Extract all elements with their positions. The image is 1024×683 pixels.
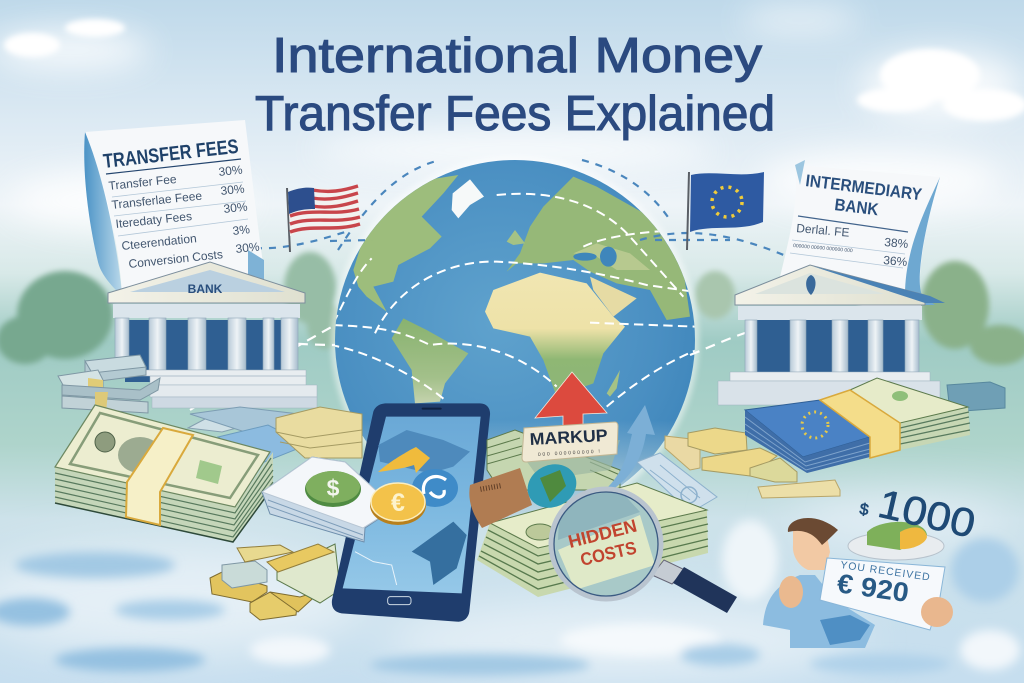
hair [788, 518, 838, 545]
continent: north america [353, 175, 458, 312]
blue rising arrow [608, 405, 655, 490]
hand holding card [921, 597, 953, 627]
receipt rows: Cteerendation [121, 231, 197, 253]
gold blocks center right [665, 428, 840, 498]
britain [507, 230, 525, 245]
red markup arrow [535, 372, 607, 430]
icon: euro coin [370, 483, 426, 525]
cash stack behind markup [487, 430, 620, 490]
receipt heading: INTERMEDIARY [805, 171, 924, 204]
large left cash stack [55, 405, 273, 542]
handle [652, 560, 737, 613]
markup label: 000 000000000 ! [538, 449, 600, 458]
continent: africa [485, 273, 625, 397]
magnifier with hidden costs [551, 489, 737, 613]
rolled document [637, 453, 717, 507]
plate with coin [848, 532, 944, 560]
receipt rows: Derlal. FE [796, 221, 850, 240]
pile of bills and gold bottom left of phone [210, 544, 340, 620]
right receipt: intermediary bank [775, 160, 940, 310]
brown envelope: ıııııııı [479, 480, 502, 495]
currency band [126, 428, 193, 525]
faded bills behind left cash [188, 407, 307, 463]
receipt rows: 3% [232, 222, 251, 238]
icon: blue swirl coin [412, 469, 458, 507]
title: Transfer Fees Explained [255, 87, 775, 141]
right bottom cash stack [477, 483, 708, 597]
left bank building [107, 262, 317, 408]
you received label: YOU RECEIVED [840, 559, 931, 584]
stack of papers [262, 457, 395, 542]
flag: united states [287, 184, 360, 252]
continent: south america [392, 318, 468, 403]
title: International Money [272, 29, 763, 83]
gold stacks behind left cash [276, 407, 362, 458]
receipt rows: 36% [883, 253, 908, 269]
trees right [695, 261, 1024, 365]
card [820, 558, 945, 630]
right bank building [718, 265, 945, 405]
icon: dollar coin: $ [327, 475, 340, 501]
receipt rows: Iteredaty Fees [115, 209, 193, 231]
person holding receipt [763, 518, 953, 648]
receipt rows: 30% [223, 200, 249, 216]
original amount: 1000 [874, 482, 979, 547]
receipt rows: 30% [218, 163, 244, 179]
shirt [763, 575, 875, 648]
trees left [0, 252, 343, 364]
hidden costs label: HIDDEN [566, 516, 639, 552]
far right small cash stack [947, 382, 1005, 412]
phone screen map [343, 417, 481, 593]
white dashed routes [330, 194, 697, 407]
receipt rows: Conversion Costs [128, 247, 224, 271]
greenland [452, 179, 484, 218]
hand at collar [779, 576, 803, 608]
icon: yellow arrow [378, 447, 430, 473]
small globe token [520, 456, 584, 516]
receipt rows: Transfer Fee [108, 172, 178, 193]
flag: european union [687, 172, 764, 250]
icon: dollar coin [305, 471, 361, 507]
globe lower fade [362, 426, 672, 520]
globe [330, 156, 699, 524]
receipt heading: TRANSFER FEES [102, 136, 240, 173]
brown envelope [469, 468, 532, 528]
receipt rows: 38% [884, 235, 909, 251]
title [255, 29, 775, 141]
receipt rows: Transferlae Feee [111, 189, 203, 212]
small cash stack beside left bank [58, 355, 160, 413]
receipt rows: 30% [220, 182, 246, 198]
receipt rows: 000000 00000 000000 000 [793, 243, 853, 254]
receipt rows [793, 221, 909, 269]
original amount: $ [858, 501, 870, 519]
currency band [820, 390, 900, 458]
blue dashed routes [255, 160, 800, 262]
madagascar [607, 370, 620, 397]
bank label: BANK [188, 282, 223, 296]
white routes over ground [190, 325, 770, 410]
columns [115, 318, 298, 370]
markup label [522, 422, 618, 462]
face [793, 519, 830, 570]
continent: eurasia [507, 177, 690, 320]
markup label: MARKUP [529, 426, 608, 449]
ground blue and white mottling [0, 498, 1010, 680]
hidden costs label [566, 516, 639, 570]
amount received: € 920 [835, 568, 911, 608]
hidden costs label: COSTS [578, 538, 638, 570]
receipt rows: 30% [235, 240, 261, 256]
arabia [590, 277, 637, 317]
phone [332, 403, 490, 622]
euro and dollar cash stack [745, 378, 970, 473]
right receipt: intermediary bank: BANK [834, 195, 880, 219]
icon: euro coin: € [391, 489, 405, 517]
roof [108, 262, 305, 303]
left receipt: transfer fees [84, 120, 264, 296]
receipt rows [108, 163, 261, 271]
